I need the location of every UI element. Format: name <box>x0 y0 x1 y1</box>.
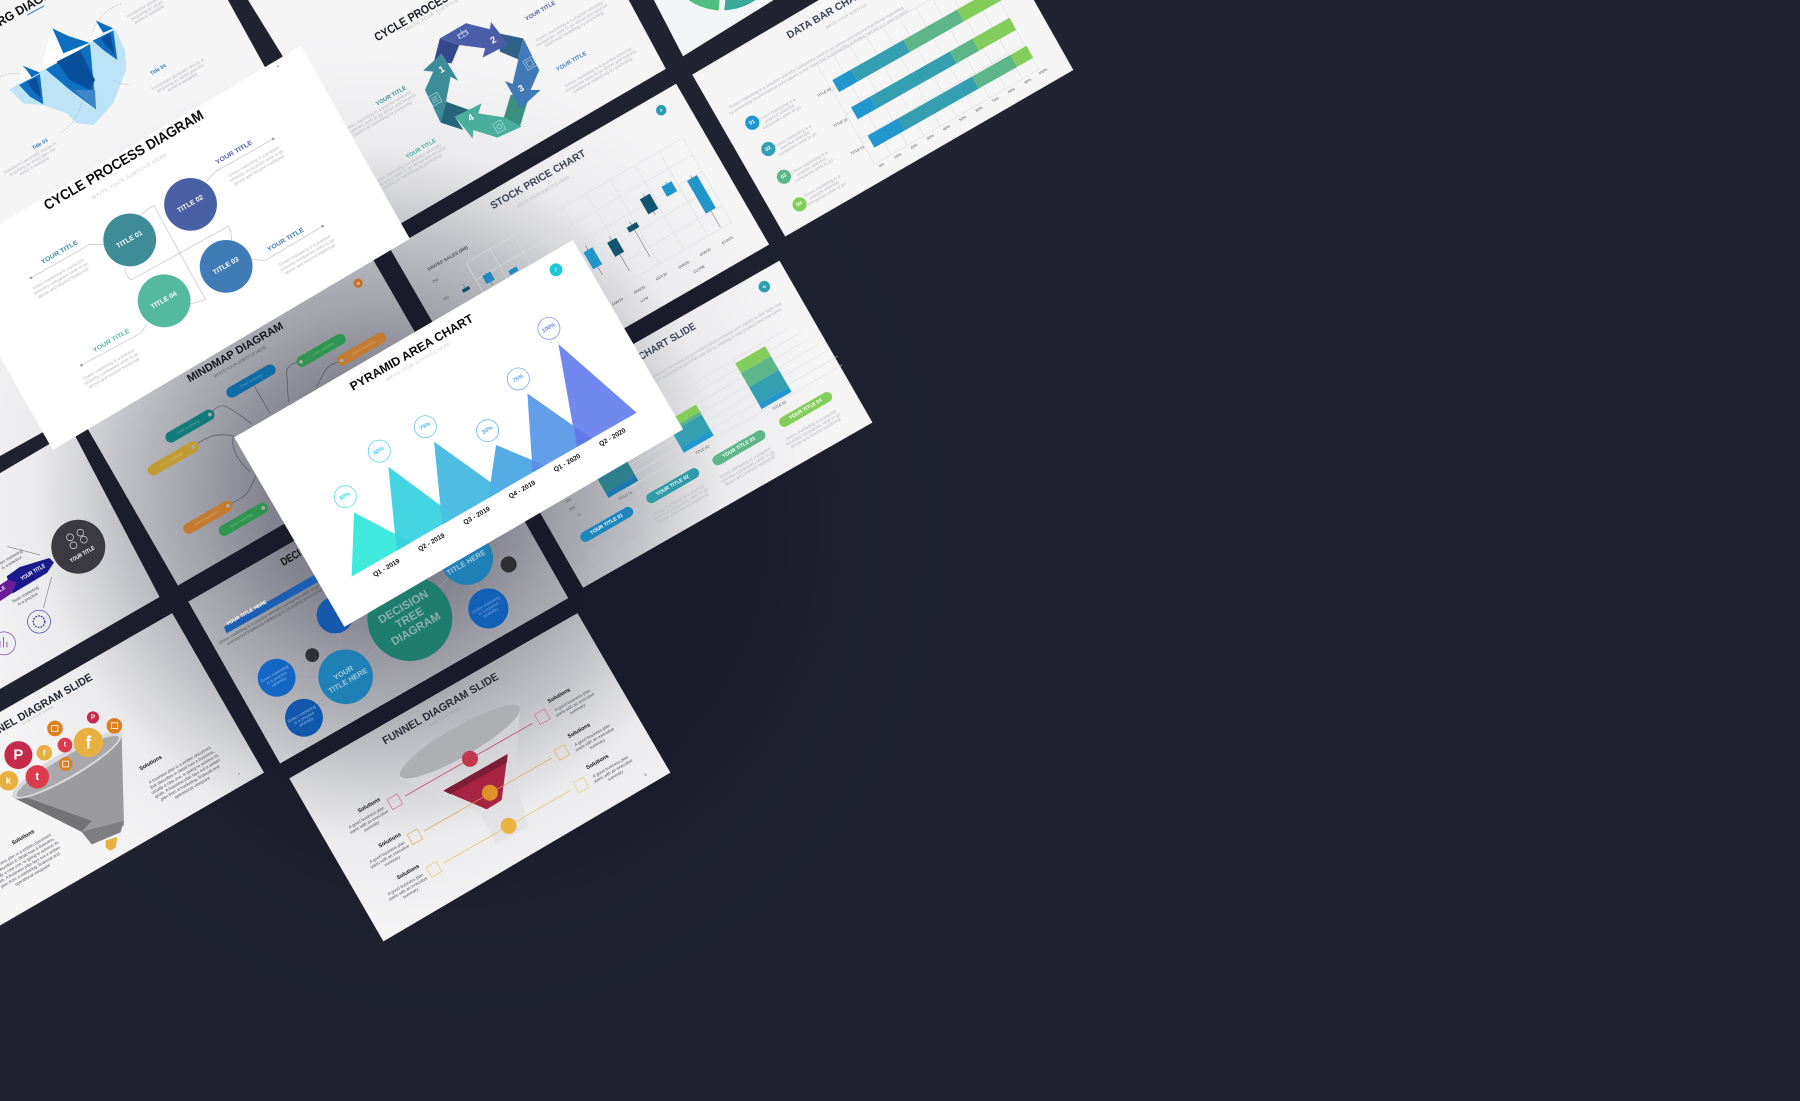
icon: dark circle: YOUR TITLE <box>69 545 96 564</box>
panel: data bar chart slide <box>692 0 1073 237</box>
pills: branches: Green marketing <box>239 373 263 389</box>
legend: numbered items: 01 <box>748 119 756 127</box>
text: solutions bodies: starts with an executive <box>388 875 429 902</box>
text: top body: whereby companies seek to go <box>229 148 285 183</box>
chart: arrow ring: 3 <box>516 83 526 94</box>
text: pill bodies: whereby companies seek to go <box>653 486 709 522</box>
chart: decision bubbles: Green marketing <box>287 703 317 724</box>
legend: numbered items: Green marketing is a <box>758 97 797 122</box>
text: solutions bodies: summary <box>588 737 607 750</box>
text: pill bodies: whereby companies seek to go <box>587 526 643 561</box>
chart: arrow ring: 1 <box>437 64 446 75</box>
circle: title 01 <box>103 214 156 266</box>
badge: page: 12 <box>356 281 360 285</box>
subtitle: SUBTITLE HERE <box>22 704 55 726</box>
chevron: purple <box>0 579 17 605</box>
column labels: TITLE 02 <box>695 444 710 456</box>
chart labels: 20% <box>910 143 919 150</box>
legend: numbered items: practice whereby <box>796 155 828 177</box>
axis labels: CLOSE <box>693 264 706 274</box>
icons: social bubbles: f <box>43 748 46 757</box>
axis labels: quarters <box>372 427 627 579</box>
chart labels: 10% <box>894 152 903 160</box>
icons: social bubbles: P <box>13 747 23 764</box>
pills: branches: Green marketing <box>194 510 218 527</box>
text: bottom body: above and beyond traditional <box>88 356 140 389</box>
panel: stacked chart slide <box>490 261 872 588</box>
pills: your titles: YOUR TITLE 02 <box>655 474 690 497</box>
chart: stacked bars <box>832 0 1033 148</box>
chart labels: 90% <box>1024 77 1033 85</box>
icon: water body <box>9 28 126 125</box>
label: title 04: Title 04 <box>149 63 168 77</box>
pills: branches: Green marketing <box>176 419 200 435</box>
text: solutions labels: Solutions <box>585 754 610 771</box>
label: your title top: YOUR TITLE <box>524 0 557 23</box>
pills: branches <box>146 330 388 538</box>
label: solutions left: Solutions <box>11 829 36 847</box>
badge: page 7: 7 <box>555 267 558 272</box>
text: solutions left body: operational viewpoint. <box>14 862 52 887</box>
text: solutions bodies: starts with an executive <box>369 843 410 870</box>
heading: decision tree: DECISION TREE DIAGRAM <box>279 501 384 569</box>
connectors <box>7 546 52 608</box>
markers <box>462 751 517 834</box>
text: solutions bodies: summary <box>363 819 381 833</box>
text: pill bodies: whereby companies seek to go <box>719 449 776 484</box>
panel: pyramid area chart slide <box>234 240 683 627</box>
connectors <box>31 139 323 365</box>
text: pill bodies: whereby companies seek to go <box>785 411 842 447</box>
legend: numbered items: 04 <box>796 200 804 208</box>
text: top body <box>126 0 169 27</box>
text: left body: whereby companies seek to go <box>33 261 89 296</box>
subtitle: WRITE YOUR SUBTITLE HERE <box>384 341 451 382</box>
chart: pyramid triangles <box>352 344 637 577</box>
chart labels: 0% <box>878 162 886 168</box>
label: your title right: YOUR TITLE <box>266 227 305 253</box>
label: your title left: YOUR TITLE <box>375 85 408 108</box>
label: your title left: YOUR TITLE <box>40 239 79 266</box>
subtitle: WRITE YOUR SUBTITLE <box>824 2 868 30</box>
axis labels: 250 <box>432 277 439 284</box>
pills: branches: Green marketing <box>311 341 335 357</box>
callouts: percent values: 75% <box>512 374 525 384</box>
callouts: percent values: 79% <box>419 421 432 432</box>
subtitle: WRITE YOUR SUBTITLE HERE <box>91 152 169 201</box>
text: right body: companies seek to go above and beyond <box>564 48 637 94</box>
grid <box>817 0 1039 164</box>
chart: decision bubbles: is a practice <box>266 670 288 686</box>
text: bottom body: traditional marketing by promoting <box>382 152 443 191</box>
text: top body: Green marketing is a practice <box>227 144 281 178</box>
heading: chart slide: CHART SLIDE <box>637 321 698 363</box>
text: description: by promoting environmental core values in the hope that sustainability activities has led to a new product <box>728 8 910 116</box>
text: left body: Green marketing is a practice whereby <box>343 89 413 132</box>
legend: numbered items: Green marketing is a <box>774 123 812 149</box>
badge: page <box>354 279 363 288</box>
axis labels: quarters: Q4 - 2019 <box>508 479 537 500</box>
axis title: GROSS SALES ($M) <box>427 244 469 272</box>
chart: decision bubbles: TITLE HERE <box>327 666 369 696</box>
axis labels <box>432 236 734 307</box>
axis labels: quarters: Q3 - 2019 <box>462 505 492 526</box>
chart labels: 100% <box>1038 67 1049 76</box>
chart: decision bubbles: TREE <box>394 605 426 631</box>
axis labels: 4/07/20 <box>655 272 668 282</box>
subtitle: WRITE YOUR SUBTITLE HERE <box>516 175 570 209</box>
text: solutions labels: Solutions <box>567 722 592 740</box>
chart labels: 60% <box>975 105 984 113</box>
icons: social bubbles: P <box>91 714 95 721</box>
panel: upper left slide fragment <box>0 344 46 459</box>
text: title 04 body: Investment generally results in <box>151 57 206 91</box>
chart labels: 70% <box>991 96 1000 104</box>
icons: social bubbles: k <box>6 776 12 786</box>
axis labels: quarters: Q2 - 2020 <box>598 427 627 448</box>
heading: funnel diagram slide: FUNNEL DIAGRAM SLIDE <box>381 671 501 747</box>
chart: decision bubbles <box>258 532 517 737</box>
column labels: 0 <box>577 513 581 517</box>
pills: your titles: YOUR TITLE 01 <box>589 512 624 536</box>
text: solutions bodies: starts with an executive <box>574 726 616 753</box>
page number: 6 <box>645 773 647 777</box>
text: navy body: Team marketing <box>11 584 40 604</box>
heading: stock price chart: STOCK PRICE CHART <box>489 148 588 212</box>
chart labels: 80% <box>1007 87 1016 94</box>
axis labels: quarters: Q1 - 2020 <box>553 453 582 474</box>
text: solutions right body <box>145 743 227 809</box>
chart: stacked columns <box>590 346 792 498</box>
text: solutions right body: that describes in detail how a business, <box>149 749 215 790</box>
axis labels: 4/06/20 <box>633 285 646 295</box>
text: right body: above and beyond traditional <box>284 243 336 276</box>
circle: title 03: TITLE 03 <box>212 256 240 277</box>
chart: decision bubbles: is a practice <box>293 710 316 726</box>
text: solutions bodies: A good business plan <box>348 805 386 830</box>
chart: arrow ring: 2 <box>489 34 498 46</box>
label: your title top: YOUR TITLE <box>215 139 254 166</box>
legend: numbered items: Green marketing is a <box>790 150 829 175</box>
text: solutions bodies: starts with an executive <box>349 808 390 835</box>
chart labels: TITLE 03 <box>817 87 832 98</box>
chart labels: 40% <box>942 124 951 132</box>
text: description: Green marketing is a practice whereby companies seek to go above and beyond traditional marketing <box>728 5 905 110</box>
chart: decision bubbles: YOUR <box>332 663 355 682</box>
panel: mindmap diagram slide <box>69 230 465 586</box>
text: solutions bodies: summary <box>569 702 587 715</box>
circle: title 04 <box>138 274 191 327</box>
text: pill bodies: Green marketing is a practice <box>586 522 640 556</box>
label: your title right: YOUR TITLE <box>555 51 588 73</box>
badge: page 7 <box>550 263 562 276</box>
text: solutions right body: A business plan is a written document <box>148 745 212 785</box>
icon: dark circle <box>51 520 105 574</box>
text: left body: above and beyond traditional <box>37 266 89 299</box>
pills: branches: Green marketing <box>159 451 184 468</box>
column labels: TITLE 01 <box>618 490 633 502</box>
chart labels: TITLE 02 <box>833 117 848 128</box>
icon: funnel <box>393 694 528 844</box>
panel: stock price chart slide <box>390 84 769 410</box>
text: solutions bodies: A good business plan <box>573 722 611 747</box>
text: solutions labels <box>357 687 610 881</box>
chart: decision bubbles: Green marketing <box>471 594 502 615</box>
icon: navy gear circle <box>28 610 51 633</box>
text: left body: traditional marketing by promoting <box>352 100 413 138</box>
callouts: percent values: 50% <box>339 491 352 502</box>
chart: candlesticks <box>460 173 725 293</box>
connectors <box>194 361 341 504</box>
text: banner body: Green marketing is a practice whereby companies seek to go above <box>218 577 331 645</box>
text: pill bodies: above and beyond traditional <box>657 491 709 524</box>
text: solutions right body: plan from a marketing, financial and <box>160 763 221 802</box>
legend: numbered items: practice whereby <box>779 129 812 151</box>
axis labels: quarters: Q1 - 2019 <box>372 558 401 579</box>
text: solutions bodies <box>346 687 636 906</box>
chart: decision bubbles: whereby <box>298 715 315 728</box>
text: title 03 body: Investment generally results in <box>2 140 58 175</box>
nodes: line end dots <box>30 138 324 366</box>
page number: 4 <box>277 65 279 69</box>
text: title 04 body: asset is available <box>167 71 199 93</box>
chart: decision bubbles: whereby <box>271 675 288 688</box>
text: solutions bodies: starts with an executive <box>555 691 596 718</box>
text: solutions bodies: summary <box>607 768 625 782</box>
text: pill bodies: above and beyond traditional <box>724 454 776 487</box>
legend: numbered items: Green marketing is a <box>803 173 842 199</box>
label: solutions right: Solutions <box>139 755 163 772</box>
chart: decision bubbles: DIAGRAM <box>389 611 443 648</box>
callouts: percent values: 80% <box>373 446 386 457</box>
column labels: TITLE 03 <box>772 400 787 411</box>
axis labels: 4/10/20 <box>721 236 734 246</box>
pills: branches: Green marketing <box>352 340 376 356</box>
text: solutions labels: Solutions <box>547 687 572 705</box>
circle: title 04: TITLE 04 <box>150 291 178 311</box>
leader lines <box>405 723 571 863</box>
heading: pyramid area chart: PYRAMID AREA CHART <box>347 311 476 394</box>
text: right body: Green marketing is a practice whereby <box>564 46 633 88</box>
text: solutions left body <box>0 831 67 896</box>
label: your title bottom: YOUR TITLE <box>92 328 131 354</box>
legend: numbered items: practice whereby <box>764 102 796 124</box>
text: pill bodies: Green marketing is a practice <box>652 483 706 517</box>
subtitle: SUBTITLE HERE <box>428 706 462 727</box>
text: solutions bodies: summary <box>383 854 402 867</box>
text: solutions bodies: A good business plan <box>592 754 630 779</box>
subtitle: WRITE YOUR SUBTITLE HERE <box>213 344 267 379</box>
legend: numbered items: practice whereby <box>808 179 841 201</box>
chevron: navy: YOUR TITLE <box>20 563 47 582</box>
chart: decision bubbles: Green marketing <box>259 663 290 684</box>
axis labels: LOW <box>640 296 650 304</box>
chart: pie arcs <box>685 0 759 10</box>
callouts: percent values: 30% <box>481 425 494 436</box>
column labels: 400 <box>565 497 572 504</box>
panel: cycle arrows slide <box>245 0 666 230</box>
column labels <box>565 400 787 517</box>
text: navy body: is a practice <box>17 591 39 607</box>
badge: page 9: 9 <box>660 108 663 113</box>
text: right body: whereby companies seek to go <box>279 237 336 272</box>
text: solutions right body: goals. A business plan lays out a written <box>154 757 222 799</box>
label: your title bottom: YOUR TITLE <box>405 138 438 160</box>
circle: title 03 <box>200 240 253 293</box>
axis labels: 4/08/20 <box>678 260 690 270</box>
text: bottom body: companies seek to go above and beyond <box>373 145 447 190</box>
icon: icebergs <box>18 21 117 109</box>
text: left body: companies seek to go above and beyond <box>343 92 417 137</box>
grid <box>466 138 732 347</box>
grid <box>599 314 842 488</box>
icons: social bubbles <box>0 711 122 791</box>
pills: your titles: YOUR TITLE 04 <box>788 397 823 421</box>
circle: title 02 <box>164 178 217 231</box>
pills: your titles: YOUR TITLE 03 <box>721 436 757 460</box>
text: left body: Green marketing is a practice <box>32 257 85 291</box>
icons: social bubbles: t <box>64 742 67 749</box>
label: title 03: Title 03 <box>31 138 49 152</box>
banner: your title here <box>224 573 318 633</box>
text: description: their sustainable activities has led to creating a new product line that cares <box>653 306 783 384</box>
legend: numbered items: 03 <box>780 173 788 181</box>
text: solutions bodies: summary <box>402 886 420 900</box>
legend: numbered items: companies seek to go <box>794 157 834 183</box>
badge: page 10: 10 <box>762 284 766 289</box>
axis labels: 4/06/20 <box>611 297 624 307</box>
panel: hexagon infographic slide <box>0 431 160 692</box>
icon: purple chart circle <box>0 632 15 655</box>
text: solutions bodies: A good business plan <box>368 840 406 864</box>
text: solutions left body: plan from a marketing, financial and <box>0 851 61 889</box>
panel: social funnel slide <box>0 613 264 929</box>
text: title 04 body: acquiring an asset also the <box>156 62 205 94</box>
legend: numbered items: companies seek to go <box>777 131 818 157</box>
circle: title 01: TITLE 01 <box>116 230 144 250</box>
chart labels: TITLE 01 <box>850 145 865 156</box>
text: pill bodies: Green marketing is a practice <box>785 408 838 442</box>
text: bottom body: whereby companies seek to go <box>83 351 140 386</box>
chart: decision bubbles: is a practice <box>477 600 500 616</box>
panel: red funnel slide <box>289 613 670 941</box>
legend: numbered items: companies seek to go <box>806 181 847 207</box>
panel: cycle process diagram slide <box>0 46 410 450</box>
pills: branches: Green marketing <box>229 512 254 529</box>
callouts: percent values: 100% <box>541 322 557 335</box>
text: top body: Green marketing is a practice whereby <box>535 0 604 43</box>
text: solutions right body: usually a new one, is going to achieve its <box>150 752 219 795</box>
text: description: traditional marketing by promoting environmental core values in the hope that <box>648 300 783 381</box>
chevron: navy <box>7 558 54 594</box>
banner: your title here: YOUR TITLE HERE <box>226 599 269 627</box>
chart labels: 30% <box>926 133 935 141</box>
icon: grey funnel <box>6 722 128 851</box>
text: right body: traditional marketing by promoting <box>572 56 634 94</box>
icons: social bubbles: t <box>35 771 39 783</box>
text: solutions labels: Solutions <box>357 797 382 815</box>
heading: mindmap diagram: MINDMAP DIAGRAM <box>185 320 286 385</box>
text: solutions labels: Solutions <box>378 832 402 850</box>
text: pill bodies: Green marketing is a practice <box>718 446 772 479</box>
text: pill bodies: above and beyond traditional <box>790 416 842 450</box>
panel: iceberg diagram slide <box>0 0 276 253</box>
axis labels: 200 <box>442 295 450 302</box>
text: right body: Green marketing is a practice <box>278 233 332 267</box>
chart: decision bubbles: DECISION <box>376 588 431 627</box>
chart: decision bubbles: TITLE HERE <box>445 548 487 577</box>
text: upper body: is a practice <box>1 554 23 570</box>
text: bottom body: Green marketing is a practice <box>82 347 136 381</box>
text: top body: companies seek to go above and beyond <box>535 2 609 48</box>
icons: social bubbles: f <box>86 732 92 752</box>
panel: pie slide fragment <box>651 0 783 56</box>
circle: title 02: TITLE 02 <box>176 194 205 215</box>
text: top body: traditional marketing by promoting <box>544 10 605 48</box>
panel: decision tree slide <box>188 436 568 763</box>
axis labels: quarters: Q2 - 2019 <box>417 532 446 553</box>
text: solutions right body: operational viewpoint. <box>174 775 212 800</box>
chart labels <box>817 67 1049 168</box>
chart: decision bubbles: whereby <box>482 606 500 619</box>
text: bottom body: Green marketing is a practice whereby <box>373 142 443 185</box>
text: top body: asset is available <box>133 3 166 25</box>
chart: arrow ring <box>423 22 541 138</box>
text: solutions labels: Solutions <box>396 864 421 881</box>
text: title 03 body: acquiring an asset also the <box>8 146 57 177</box>
text: solutions bodies: A good business plan <box>387 872 425 896</box>
text: solutions bodies: starts with an executive <box>593 757 634 784</box>
text: top body: above and beyond traditional <box>233 154 285 187</box>
callouts: percent values <box>334 317 560 508</box>
page number: 7 <box>238 773 240 777</box>
text: solutions bodies: A good business plan <box>554 688 592 712</box>
badge: page 10 <box>759 281 770 292</box>
text: title 03 body: asset is available <box>18 155 51 177</box>
legend: numbered items <box>745 96 847 211</box>
chart labels: 50% <box>959 115 968 122</box>
text: banner body: and beyond traditional marketing by promoting environmental <box>226 584 328 646</box>
axis labels: 4/09/20 <box>699 247 712 257</box>
pills: your titles <box>578 390 834 544</box>
badge: page 9 <box>656 105 667 115</box>
connectors <box>277 558 509 718</box>
icons: solution icons <box>387 709 589 877</box>
column labels: 200 <box>569 505 576 512</box>
text: pill bodies: above and beyond traditional <box>591 531 643 564</box>
legend: numbered items: 02 <box>764 145 772 153</box>
chart: arrow ring: 4 <box>466 112 476 123</box>
legend: numbered items: companies seek to go <box>762 104 802 130</box>
text: pill bodies <box>585 407 844 565</box>
heading: cycle process diagram: CYCLE PROCESS DIAGRAM <box>41 108 207 214</box>
